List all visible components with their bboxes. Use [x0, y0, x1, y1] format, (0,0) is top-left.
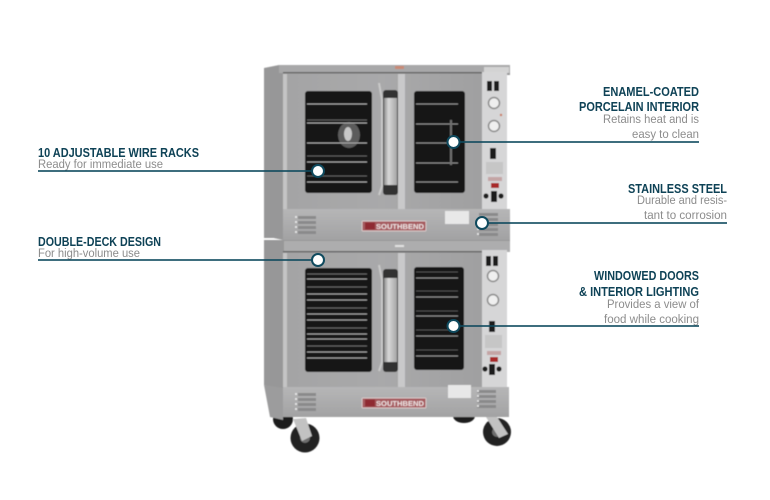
front right caster: [483, 417, 511, 446]
lower oven: [264, 240, 510, 420]
callout: double-deck design: [38, 235, 324, 266]
oven illustration: [264, 65, 511, 452]
base with logo and vents: SOUTHBEND: [376, 399, 425, 408]
base with logo and vents: SOUTHBEND: [376, 222, 425, 231]
callout: stainless steel: STAINLESS STEEL: [628, 182, 727, 196]
door handle: [379, 83, 398, 195]
base with logo and vents: [264, 385, 509, 420]
callout: windowed doors and interior lighting: Provides a view of: [607, 297, 700, 311]
callout: 10 adjustable wire racks: [38, 146, 324, 177]
callout: enamel-coated porcelain interior: [448, 85, 699, 148]
front left caster: [290, 418, 320, 452]
callout: stainless steel: Durable and resis-: [637, 193, 727, 207]
control panel: [482, 250, 507, 387]
callout: 10 adjustable wire racks: Ready for immediate use: [38, 157, 163, 171]
left window: [305, 91, 372, 193]
left window: [305, 268, 372, 372]
rear casters: [273, 409, 475, 429]
callout: double-deck design: For high-volume use: [38, 246, 140, 260]
callout: windowed doors and interior lighting: [448, 269, 700, 332]
right window: [414, 267, 464, 370]
callout: enamel-coated porcelain interior: Retains heat and is: [603, 112, 699, 126]
callout: stainless steel: [476, 182, 727, 229]
callout: windowed doors and interior lighting: WINDOWED DOORS: [594, 269, 699, 283]
callout: enamel-coated porcelain interior: easy to clean: [632, 127, 699, 141]
right window: [414, 91, 465, 193]
callout: enamel-coated porcelain interior: PORCELAIN INTERIOR: [579, 100, 699, 114]
control panel: [482, 72, 507, 209]
callout: windowed doors and interior lighting: food while cooking: [604, 312, 699, 326]
upper oven: [264, 65, 510, 240]
callout: 10 adjustable wire racks: 10 ADJUSTABLE WIRE RACKS: [38, 146, 199, 160]
callout: double-deck design: DOUBLE-DECK DESIGN: [38, 235, 161, 249]
base with logo and vents: [264, 209, 510, 240]
callout: enamel-coated porcelain interior: ENAMEL-COATED: [603, 85, 699, 99]
callout: windowed doors and interior lighting: & INTERIOR LIGHTING: [579, 285, 699, 299]
callout: stainless steel: tant to corrosion: [644, 208, 727, 222]
door handle: [379, 265, 398, 372]
